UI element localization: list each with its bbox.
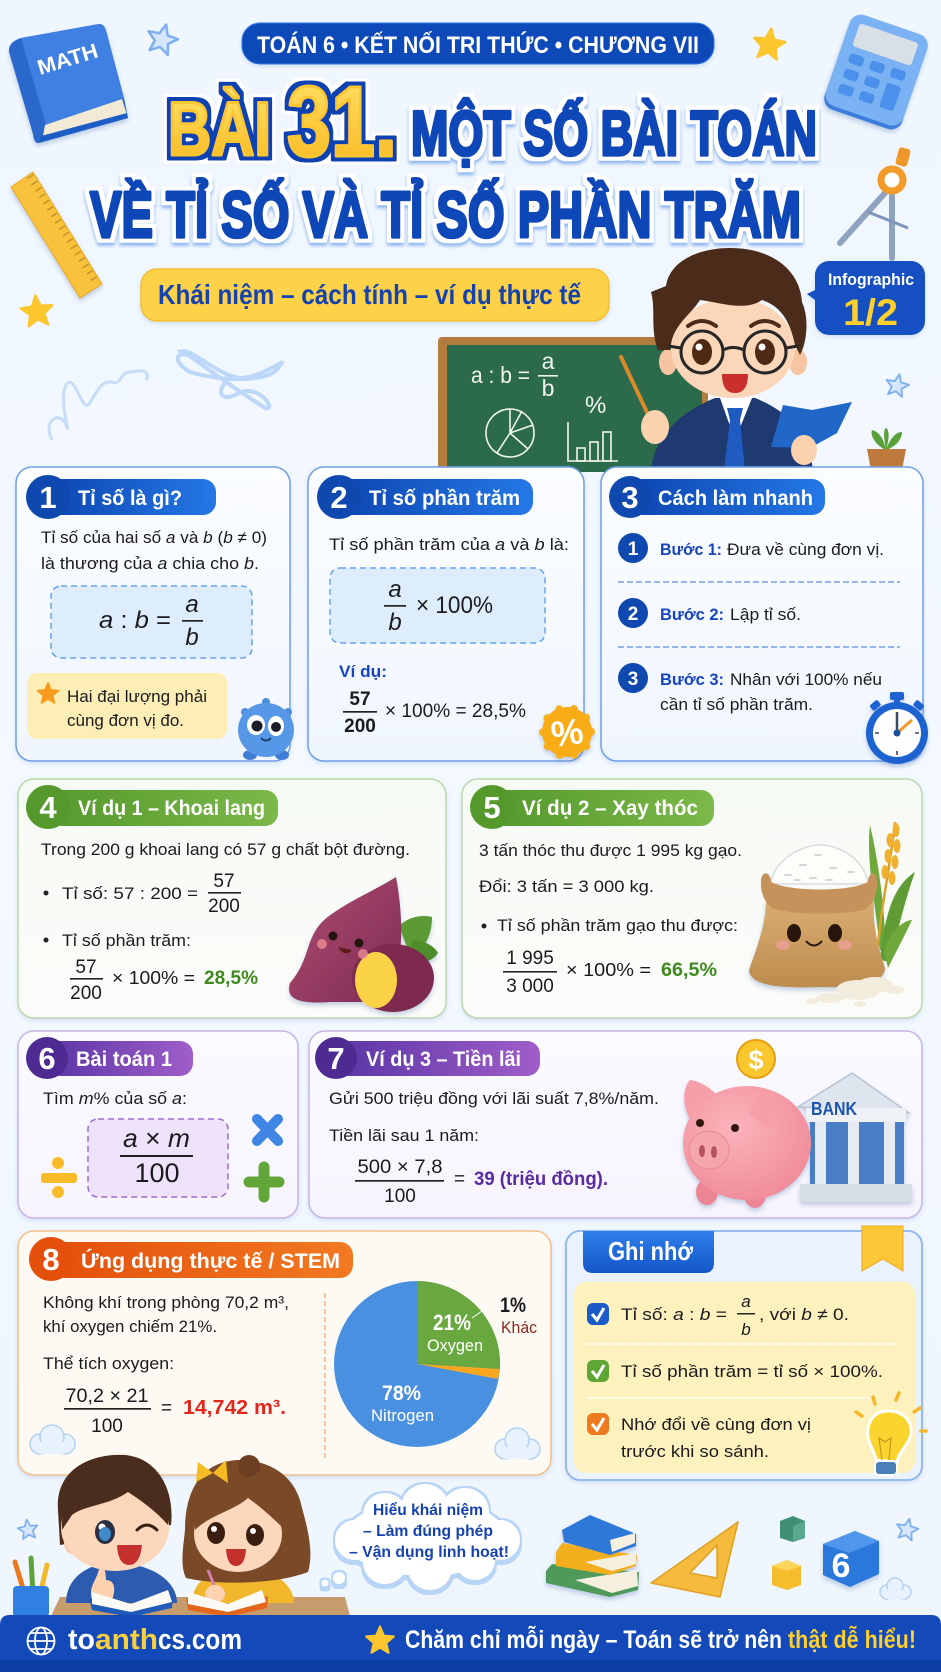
icon: green die	[780, 1516, 805, 1542]
pie label: other: Khác	[501, 1318, 537, 1337]
problem formula: 100	[134, 1158, 180, 1188]
panel 3: quick steps	[601, 467, 928, 764]
rice texture	[785, 855, 854, 880]
percent formula box: × 100%	[416, 592, 493, 619]
sack face	[776, 924, 852, 950]
heading 8: Ứng dụng thực tế / STEM	[81, 1249, 340, 1273]
takeaway 3: Nhớ đổi về cùng đơn vị	[621, 1415, 811, 1434]
footer bar	[0, 1615, 941, 1672]
infographic badge: Infographic	[828, 270, 914, 289]
website: cs.com	[158, 1624, 242, 1656]
pie chart: 21%	[433, 1310, 471, 1335]
heading 5: Ví dụ 2 – Xay thóc	[522, 797, 698, 820]
heading 8: 8	[42, 1242, 60, 1277]
heading 1: 1	[39, 480, 57, 515]
example 1 statement: Trong 200 g khoai lang có 57 g chất bột đường.	[41, 840, 410, 859]
percent example	[339, 662, 526, 737]
heading 4: Ví dụ 1 – Khoai lang	[78, 797, 265, 820]
wheat	[869, 822, 915, 968]
icon: bank	[798, 1073, 912, 1202]
heading 1: Tỉ số là gì?	[78, 487, 182, 510]
rice grains	[806, 977, 905, 1007]
percent line: 28,5%	[204, 968, 258, 989]
open books on table	[89, 1590, 268, 1617]
icon: bookmark	[862, 1226, 903, 1271]
teacher eyes	[692, 339, 775, 365]
title line 1	[168, 66, 817, 178]
heading 2: Tỉ số phần trăm	[369, 487, 520, 510]
speech cloud	[322, 1484, 520, 1590]
STEM formula	[64, 1386, 286, 1437]
sack rim	[761, 873, 877, 914]
icon: set square	[651, 1522, 738, 1597]
chalkboard pie	[486, 409, 534, 457]
step 3: 3	[628, 669, 638, 690]
icon: globe	[28, 1628, 54, 1654]
icon: blue mascot	[238, 698, 294, 760]
STEM statement: khí oxygen chiếm 21%.	[43, 1317, 217, 1336]
cloud text: Hiểu khái niệm	[373, 1501, 483, 1519]
step 3: cần tỉ số phần trăm.	[660, 695, 813, 714]
icon: gold coin	[737, 1040, 775, 1078]
pie chart: 78%	[382, 1382, 421, 1405]
panel 1: what is a ratio	[16, 467, 294, 761]
subtitle pill: Khái niệm – cách tính – ví dụ thực tế	[158, 279, 581, 310]
icon: math book	[9, 24, 128, 143]
definition text	[41, 528, 267, 573]
teacher brows	[688, 321, 779, 326]
teacher character	[621, 248, 852, 470]
step 1	[618, 533, 884, 563]
takeaway 1: , với b ≠ 0.	[759, 1305, 849, 1324]
icon: compass	[840, 147, 911, 258]
icon: stack of books	[546, 1515, 639, 1597]
step 1: 1	[628, 539, 639, 560]
ratio line	[44, 871, 241, 917]
icon: bank: BANK	[811, 1099, 857, 1119]
title: lesson number	[168, 66, 397, 178]
interest formula: =	[454, 1169, 465, 1190]
heading 6	[26, 1037, 193, 1079]
panel 7: example interest	[309, 1031, 922, 1218]
icon: rice sack	[749, 822, 915, 1007]
panel: key takeaways	[566, 1226, 926, 1480]
icon: gold cube	[772, 1560, 801, 1590]
problem statement: Tìm m% của số a:	[43, 1089, 187, 1108]
heading 2	[317, 475, 533, 519]
percent formula box	[330, 568, 545, 643]
problem formula	[88, 1119, 228, 1197]
heading 6: 6	[38, 1041, 56, 1076]
footer slogan: thật dễ hiểu!	[788, 1624, 916, 1654]
step 3: Bước 3:	[660, 670, 724, 689]
heading 4: 4	[39, 790, 57, 825]
icon: percent badge	[542, 707, 592, 757]
pie chart	[334, 1281, 500, 1447]
percent example: Ví dụ:	[339, 662, 387, 681]
icon: outline star bottom right	[894, 1516, 920, 1541]
note: cùng đơn vị đo.	[67, 711, 184, 730]
decorative swirl right	[178, 351, 282, 408]
chalkboard formula	[471, 348, 606, 419]
takeaway 2: Tỉ số phần trăm = tỉ số × 100%.	[621, 1362, 883, 1381]
icon: multiply	[257, 1119, 278, 1141]
tab heading: Ghi nhớ	[608, 1236, 693, 1266]
cloud text	[349, 1501, 509, 1561]
cloud text: – Làm đúng phép	[363, 1523, 493, 1540]
panel 2: percentage	[308, 467, 592, 761]
icon: outline star bottom left	[17, 1518, 39, 1540]
icon: sweet potato	[289, 877, 438, 1012]
icon: gold coin: $	[748, 1045, 764, 1075]
website: anth	[95, 1624, 158, 1656]
subtitle pill	[141, 269, 609, 321]
header pill: course line	[242, 23, 714, 64]
sack body	[749, 900, 885, 987]
percent line: 200	[70, 983, 102, 1004]
heading 3	[609, 476, 825, 518]
icon: stopwatch	[866, 692, 928, 764]
decorative swirl left	[49, 371, 147, 440]
takeaway 1: a	[741, 1292, 751, 1311]
step 1: Bước 1:	[660, 540, 722, 559]
title: lesson number: 31.	[287, 66, 397, 178]
example 2 statement: 3 tấn thóc thu được 1 995 kg gạo.	[479, 841, 742, 860]
pie chart: Oxygen	[427, 1336, 483, 1355]
formula box: a	[185, 591, 199, 618]
panel 8: STEM	[18, 1231, 551, 1475]
ratio line: 57	[213, 871, 235, 892]
table and pencil cup	[13, 1558, 350, 1617]
cloud text: – Vận dụng linh hoạt!	[349, 1544, 509, 1561]
infographic badge: 1/2	[843, 292, 898, 333]
interest formula: 39 (triệu đồng).	[474, 1169, 608, 1190]
heading 5: 5	[483, 790, 501, 825]
definition text: Tỉ số của hai số a và b (b ≠ 0)	[41, 528, 267, 547]
title: lesson number: BÀI	[168, 87, 271, 172]
heading 7: Ví dụ 3 – Tiền lãi	[366, 1048, 521, 1071]
ratio line: Tỉ số: 57 : 200 =	[62, 884, 198, 903]
panel 5: example rice	[462, 779, 922, 1018]
step 2: Bước 2:	[660, 605, 724, 624]
rice percent line: 66,5%	[661, 960, 717, 981]
teacher hand	[641, 410, 669, 444]
girl character	[182, 1455, 310, 1603]
boy character	[58, 1455, 177, 1603]
heading 2: 2	[330, 480, 348, 515]
teacher ears	[659, 349, 677, 375]
heading 4	[26, 785, 278, 829]
percent example: 200	[344, 716, 376, 737]
icon: percent badge: %	[548, 710, 586, 755]
heading 3: Cách làm nhanh	[658, 487, 813, 510]
heading 8	[29, 1237, 353, 1281]
step 1: Đưa về cùng đơn vị.	[727, 540, 884, 559]
takeaway 2	[587, 1360, 883, 1382]
footer slogan: Chăm chỉ mỗi ngày – Toán sẽ trở nên	[405, 1624, 782, 1654]
pie chart: Nitrogen	[371, 1406, 434, 1425]
icon: divide	[41, 1157, 77, 1198]
STEM formula: 14,742 m³.	[183, 1397, 286, 1419]
website	[68, 1624, 242, 1656]
rice	[771, 845, 868, 884]
step 3: Nhân với 100% nếu	[730, 670, 882, 689]
chalkboard formula: %	[585, 392, 606, 419]
heading 7	[315, 1037, 540, 1079]
icon: plant	[867, 428, 906, 470]
icon: blue number cube	[823, 1531, 879, 1587]
rice percent line: 1 995	[506, 948, 554, 969]
step 3	[618, 663, 882, 714]
website: to	[68, 1624, 95, 1656]
cup	[13, 1586, 49, 1617]
chalkboard formula: b	[542, 375, 554, 401]
icon: math book: MATH	[35, 40, 101, 80]
icon: piggy bank	[683, 1080, 811, 1208]
infographic badge	[807, 261, 925, 335]
icon: cloud left	[30, 1425, 75, 1454]
interest formula: 500 × 7,8	[358, 1157, 442, 1178]
pie label: other	[500, 1294, 537, 1337]
icon: plus	[249, 1167, 279, 1197]
icon: gold star top	[752, 26, 787, 60]
icon: ruler	[11, 172, 102, 298]
ratio line: 200	[208, 896, 240, 917]
teacher body	[651, 398, 813, 470]
heading 7: 7	[327, 1041, 345, 1076]
icon: light bulb	[856, 1393, 926, 1475]
example 3 statement	[329, 1089, 659, 1145]
step 2: Lập tỉ số.	[730, 605, 801, 624]
header pill: course line: TOÁN 6 • KẾT NỐI TRI THỨC • CHƯƠNG VII	[257, 31, 699, 59]
pie label: other: 1%	[500, 1294, 526, 1317]
icon: calculator	[821, 11, 931, 133]
percent line	[44, 931, 258, 1004]
step 2	[618, 598, 801, 628]
formula box: a : b =	[99, 607, 171, 634]
icon: footer star	[366, 1626, 394, 1653]
panel 6: problem 1	[18, 1031, 298, 1218]
definition text: là thương của a chia cho b.	[41, 554, 259, 573]
heading 1	[26, 475, 216, 519]
takeaway 3: trước khi so sánh.	[621, 1442, 769, 1461]
heading 3: 3	[621, 480, 639, 515]
problem formula: a × m	[123, 1123, 190, 1153]
percent line: 57	[75, 957, 97, 978]
rice percent line	[482, 916, 738, 997]
heading 6: Bài toán 1	[76, 1048, 172, 1071]
interest formula: 100	[384, 1186, 416, 1207]
percent line: × 100% =	[112, 968, 195, 988]
STEM formula: 70,2 × 21	[66, 1386, 148, 1407]
note: Hai đại lượng phải	[67, 687, 207, 706]
percent example: 57	[349, 689, 371, 710]
example 2 statement	[479, 841, 742, 896]
icon: cloud right	[495, 1428, 540, 1459]
icon: outline star right	[884, 372, 911, 398]
percent example: × 100% = 28,5%	[385, 701, 526, 722]
STEM statement: Không khí trong phòng 70,2 m³,	[43, 1293, 289, 1312]
STEM statement	[43, 1293, 289, 1373]
icon: gold star left	[20, 294, 54, 327]
takeaway 1: Tỉ số: a : b =	[621, 1305, 727, 1324]
STEM statement: Thể tích oxygen:	[43, 1354, 174, 1373]
takeaway 1: b	[741, 1320, 751, 1339]
example 3 statement: Gửi 500 triệu đồng với lãi suất 7,8%/năm.	[329, 1089, 659, 1108]
teacher open book	[771, 402, 852, 448]
icon: outline star top left	[144, 21, 181, 56]
pencils	[15, 1558, 47, 1595]
STEM formula: 100	[91, 1416, 123, 1437]
takeaway 1	[587, 1292, 849, 1339]
chalkboard	[438, 337, 708, 472]
teacher face	[671, 298, 795, 398]
example 3 statement: Tiền lãi sau 1 năm:	[329, 1126, 479, 1145]
percent formula box: a	[388, 576, 402, 603]
STEM formula: =	[161, 1398, 172, 1419]
takeaway 3	[587, 1413, 811, 1461]
heading 5	[470, 785, 714, 829]
yellow takeaways box	[574, 1282, 915, 1473]
icon: cloud bottom right	[880, 1578, 911, 1599]
rice percent line: 3 000	[506, 976, 554, 997]
percent line: Tỉ số phần trăm:	[62, 931, 191, 950]
teacher pointer	[621, 357, 660, 440]
rice percent line: × 100% =	[566, 960, 651, 980]
percent definition: Tỉ số phần trăm của a và b là:	[329, 535, 569, 554]
percent formula box: b	[388, 609, 402, 636]
note	[27, 673, 227, 739]
interest formula	[355, 1157, 608, 1207]
chalkboard bars	[568, 422, 618, 461]
icon: blue number cube: 6	[832, 1547, 850, 1585]
rice percent line: Tỉ số phần trăm gạo thu được:	[497, 916, 738, 935]
formula box: b	[185, 624, 199, 651]
chalkboard formula: a	[542, 348, 555, 374]
teacher hair	[651, 248, 806, 355]
tab heading	[583, 1231, 714, 1273]
panel 4: example sweet potato	[18, 779, 446, 1018]
formula box	[51, 586, 252, 658]
teacher mouth	[722, 374, 748, 393]
chalkboard formula: a : b =	[471, 362, 530, 388]
table	[51, 1597, 350, 1616]
teacher glasses	[668, 331, 798, 373]
example 2 statement: Đổi: 3 tấn = 3 000 kg.	[479, 877, 654, 896]
step 2: 2	[628, 604, 638, 625]
